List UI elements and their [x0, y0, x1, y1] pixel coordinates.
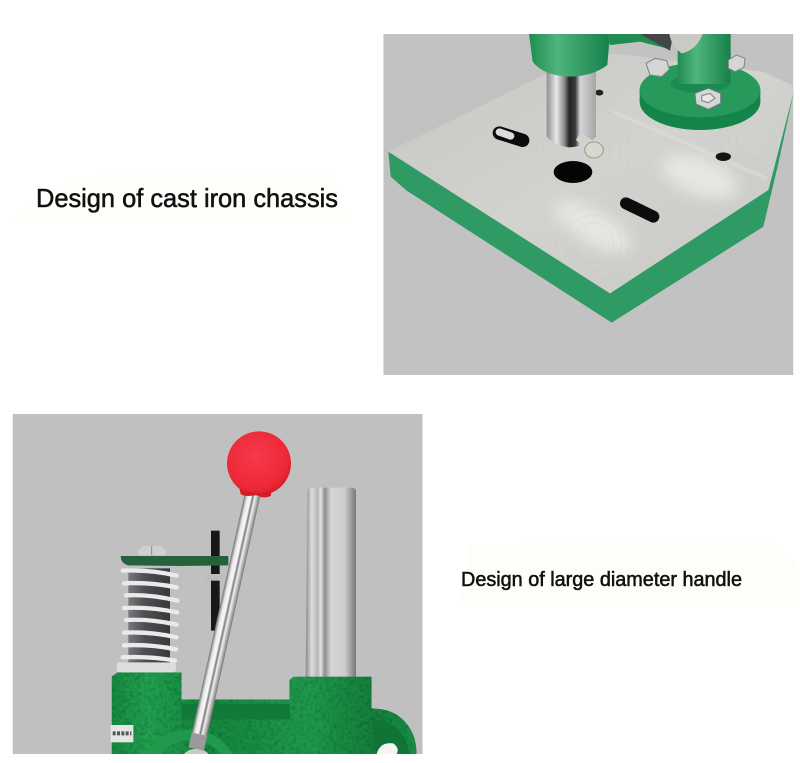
small hole behind pin: [595, 90, 603, 96]
black threaded rod: [211, 531, 220, 631]
green arm behind housing: [607, 34, 670, 48]
lever arm plate: [121, 556, 228, 566]
steel post: [306, 488, 356, 679]
round hole: [554, 161, 592, 183]
red ball knob: [227, 431, 291, 497]
text glow: chassis caption background: [10, 172, 350, 222]
sticker on body: [111, 725, 133, 742]
base plate green side: [388, 87, 795, 323]
slot hole: left: [499, 132, 523, 140]
plate highlights and machining marks: [543, 103, 793, 280]
panel background: [383, 34, 793, 375]
caption: large diameter handle: Design of large diameter handle: [461, 569, 742, 591]
green cast body: [112, 672, 417, 754]
green spindle housing: [529, 34, 610, 77]
text glow: handle caption background: [460, 543, 800, 606]
bolt on lever arm: [138, 546, 166, 555]
bolt: front: [695, 88, 721, 109]
chrome handle rod: [189, 493, 260, 751]
slot hole: right: [626, 203, 653, 217]
silver lever head: [669, 34, 703, 53]
nut on threaded rod: [211, 574, 220, 581]
flange base: [640, 63, 760, 130]
caption: cast iron chassis: Design of cast iron chassis: [36, 183, 338, 213]
spring: [117, 568, 177, 672]
set screw: [576, 133, 603, 158]
steel spindle: [547, 70, 596, 147]
bolt: left: [646, 58, 669, 77]
bolt: right: [728, 55, 745, 72]
dark lever wedge: [640, 34, 673, 51]
small hole: [716, 152, 731, 161]
base plate top surface: [388, 53, 795, 293]
panel: cast iron chassis photo: [383, 34, 795, 375]
panel: large diameter handle photo: [13, 414, 423, 754]
column: [671, 34, 731, 93]
panel background: [13, 414, 423, 754]
